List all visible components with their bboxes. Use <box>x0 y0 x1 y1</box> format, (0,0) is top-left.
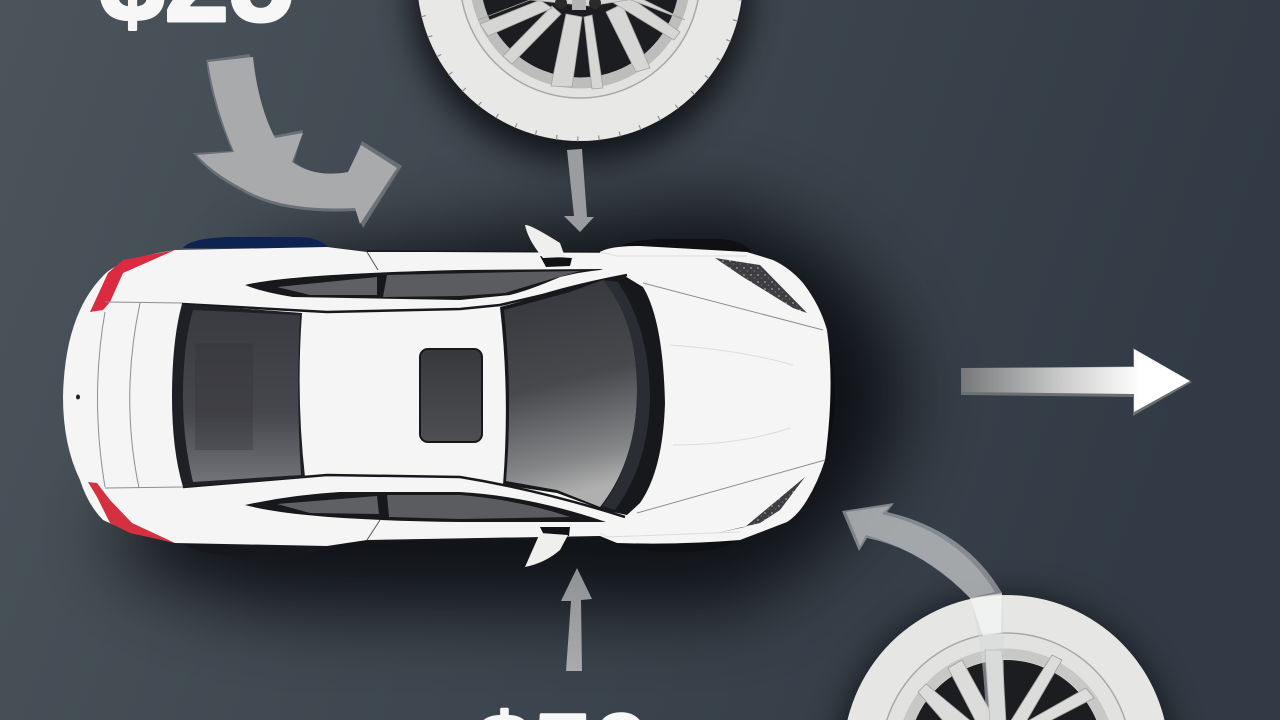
car <box>63 225 835 567</box>
wheel shadow <box>836 594 1176 720</box>
hood highlights <box>600 252 793 537</box>
arrow: top wheel to car <box>564 149 594 232</box>
wheel opening <box>908 660 1104 720</box>
rear window <box>172 304 305 487</box>
mirror: top <box>525 225 572 267</box>
windshield <box>500 275 665 515</box>
door sill shadow <box>367 251 600 541</box>
wheel: top <box>410 0 750 162</box>
spokes <box>918 650 1094 720</box>
mirror: bottom <box>525 527 570 567</box>
sunroof <box>420 349 482 442</box>
car body <box>63 246 831 546</box>
car shadow <box>110 205 905 610</box>
headlight: top <box>715 258 807 313</box>
side window: bottom <box>245 492 606 522</box>
lug holes <box>555 0 567 9</box>
tire <box>417 0 743 141</box>
wheel: bottom right <box>836 594 1176 720</box>
tail light: top <box>90 250 175 312</box>
wheel arches <box>183 237 835 556</box>
spokes <box>478 0 685 89</box>
rim ring <box>881 633 1131 720</box>
wheel shadow <box>410 0 750 162</box>
headlight: bottom <box>717 477 805 533</box>
curved arrow: bottom wheel to car <box>842 503 1004 720</box>
arrow: bottom price to car <box>561 568 592 671</box>
rear mark <box>76 394 80 400</box>
wheel opening <box>480 0 680 78</box>
side window: top <box>245 269 603 300</box>
curved arrow: top left <box>193 54 402 228</box>
rim ring <box>460 0 700 98</box>
rear body lines <box>98 252 825 540</box>
arrow: exit right <box>961 348 1192 416</box>
roof rail lines <box>182 275 627 517</box>
tire <box>843 595 1169 720</box>
tail light: bottom <box>88 482 175 543</box>
